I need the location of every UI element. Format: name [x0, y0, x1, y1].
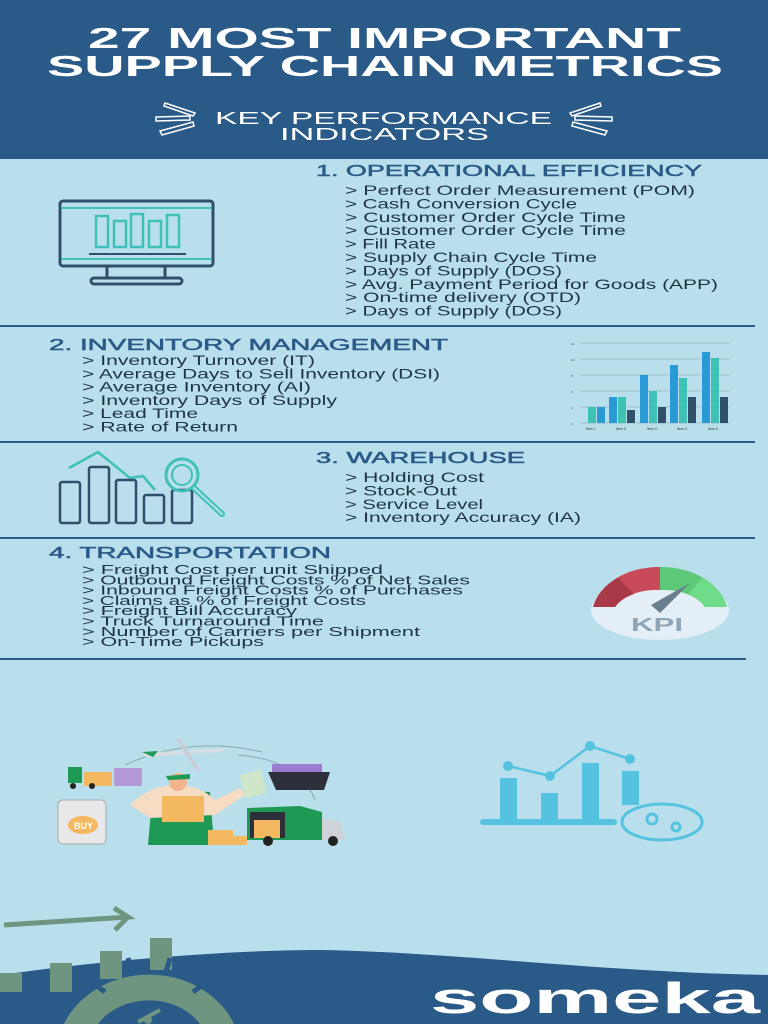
footer wave — [0, 950, 768, 1024]
list 3: > Inventory Accuracy (IA) — [345, 509, 581, 525]
list 1 — [345, 182, 718, 318]
list 1: > Perfect Order Measurement (POM) — [345, 182, 695, 198]
icon: KPI gauge: KPI — [631, 615, 683, 635]
bar chart: Item 2 — [616, 427, 626, 431]
title: 27 MOST IMPORTANT — [88, 23, 682, 55]
list 4: > Outbound Freight Costs % of Net Sales — [82, 572, 471, 587]
list 2: > Rate of Return — [82, 418, 238, 434]
list 2: > Inventory Turnover (IT) — [82, 352, 315, 368]
section 4: transportation — [49, 545, 729, 649]
list 4: > On-Time Pickups — [82, 634, 265, 649]
section 2: inventory management — [49, 337, 729, 434]
heading 4: 4. TRANSPORTATION — [49, 545, 331, 562]
icon: analytics chart with gears — [480, 741, 702, 840]
subtitle: INDICATORS — [280, 124, 489, 144]
list 2: > Average Inventory (AI) — [82, 379, 311, 395]
title: SUPPLY CHAIN METRICS — [47, 51, 723, 83]
heading 2: 2. INVENTORY MANAGEMENT — [49, 337, 448, 354]
list 1: > Customer Order Cycle Time — [345, 209, 626, 225]
bar chart: 12 — [571, 342, 575, 346]
list 2: > Lead Time — [82, 405, 198, 421]
bar chart: Item 5 — [708, 427, 718, 431]
list 4: > Claims as % of Freight Costs — [82, 593, 367, 608]
bar chart: Item 4 — [677, 427, 687, 431]
illustration: logistics person — [58, 738, 345, 846]
section 1: operational efficiency — [60, 163, 718, 318]
subtitle — [215, 108, 552, 144]
list 1: > Customer Order Cycle Time — [345, 222, 626, 238]
heading 1: 1. OPERATIONAL EFFICIENCY — [316, 163, 703, 180]
list 3: > Service Level — [345, 496, 483, 512]
header band — [0, 0, 768, 159]
icon: monitor — [60, 201, 213, 284]
bar chart: 0 — [571, 422, 573, 426]
icon: bars with magnifier — [60, 452, 222, 523]
list 4: > Number of Carriers per Shipment — [82, 624, 421, 639]
list 2: > Inventory Days of Supply — [82, 392, 337, 408]
list 3: > Holding Cost — [345, 469, 484, 485]
bar chart: 10 — [571, 358, 575, 362]
list 4: > Freight Bill Accuracy — [82, 603, 298, 618]
bar chart: 6 — [571, 390, 573, 394]
list 4: > Inbound Freight Costs % of Purchases — [82, 583, 464, 598]
list 1: > Avg. Payment Period for Goods (APP) — [345, 276, 718, 292]
list 3 — [345, 469, 581, 525]
list 4 — [82, 562, 471, 649]
heading 3: 3. WAREHOUSE — [316, 450, 525, 467]
bar chart: Item 1 — [586, 427, 596, 431]
list 1: > On-time delivery (OTD) — [345, 289, 581, 305]
icon: KPI gauge — [591, 567, 729, 640]
list 1: > Supply Chain Cycle Time — [345, 249, 597, 265]
list 4: > Freight Cost per unit Shipped — [82, 562, 383, 577]
list 1: > Days of Supply (DOS) — [345, 302, 562, 318]
list 3: > Stock-Out — [345, 482, 457, 498]
list 1: > Days of Supply (DOS) — [345, 262, 562, 278]
decorative rays left — [156, 103, 195, 135]
bar chart: Item 3 — [647, 427, 657, 431]
illustration: logistics person: BUY — [74, 821, 93, 831]
list 1: > Cash Conversion Cycle — [345, 196, 577, 212]
bar chart — [571, 342, 729, 431]
list 2: > Average Days to Sell Inventory (DSI) — [82, 365, 440, 381]
subtitle: KEY PERFORMANCE — [215, 108, 552, 128]
section 3: warehouse — [60, 450, 581, 525]
list 2 — [82, 352, 440, 434]
title — [47, 23, 723, 83]
logo: someka: someka — [430, 974, 761, 1023]
icon: growth gauge — [0, 908, 234, 1024]
decorative rays right — [570, 103, 612, 135]
bar chart: 2 — [571, 406, 573, 410]
list 1: > Fill Rate — [345, 236, 436, 252]
bar chart: 8 — [571, 374, 573, 378]
list 4: > Truck Turnaround Time — [82, 614, 324, 628]
